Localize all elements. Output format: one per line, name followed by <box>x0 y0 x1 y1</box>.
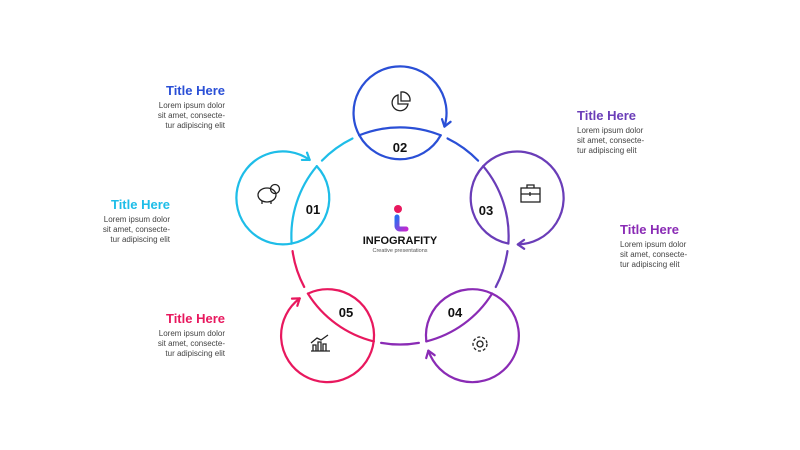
numbers: 02 <box>393 140 407 155</box>
circle 04 <box>381 270 537 419</box>
circle 03 <box>457 139 585 287</box>
numbers <box>306 140 493 320</box>
logo: INFOGRAFITY <box>363 235 438 247</box>
circle 01 <box>224 109 352 257</box>
text: step 02: Lorem ipsum dolor <box>159 101 225 110</box>
text: step 01: Title Here <box>111 197 170 212</box>
circle 02 <box>354 66 478 161</box>
text: step 02: Title Here <box>166 83 225 98</box>
icon: chart <box>311 335 330 351</box>
text: step 02 <box>158 83 225 130</box>
numbers: 04 <box>448 305 463 320</box>
text: step 01 <box>103 197 170 244</box>
text: step 01: tur adipiscing elit <box>110 235 170 244</box>
numbers: 05 <box>339 305 353 320</box>
text: step 04: Lorem ipsum dolor <box>620 240 686 249</box>
text: step 04: tur adipiscing elit <box>620 260 680 269</box>
text: step 03: Lorem ipsum dolor <box>577 126 643 135</box>
numbers: 03 <box>479 203 493 218</box>
text: step 05: sit amet, consecte- <box>158 339 225 348</box>
text: step 02: sit amet, consecte- <box>158 111 225 120</box>
icon: piggy <box>258 184 280 204</box>
numbers: 01 <box>306 202 320 217</box>
text: step 03 <box>577 108 644 155</box>
text: step 05: Lorem ipsum dolor <box>159 329 225 338</box>
text: step 02: tur adipiscing elit <box>165 121 225 130</box>
text: step 03: sit amet, consecte- <box>577 136 644 145</box>
text: step 05: tur adipiscing elit <box>165 349 225 358</box>
text: step 01: sit amet, consecte- <box>103 225 170 234</box>
icon: briefcase <box>521 185 540 202</box>
logo: Creative presentations <box>372 248 428 254</box>
text: step 01: Lorem ipsum dolor <box>104 215 170 224</box>
text: step 05 <box>158 311 225 358</box>
text: step 04: sit amet, consecte- <box>620 250 687 259</box>
text: step 03: Title Here <box>577 108 636 123</box>
circle 05 <box>237 251 393 401</box>
text: step 05: Title Here <box>166 311 225 326</box>
text: step 04 <box>620 222 687 269</box>
icon: pie <box>392 92 410 111</box>
icons <box>258 92 540 351</box>
icon: gear <box>473 337 487 351</box>
logo <box>363 205 438 254</box>
text: step 03: tur adipiscing elit <box>577 146 637 155</box>
text: step 04: Title Here <box>620 222 679 237</box>
